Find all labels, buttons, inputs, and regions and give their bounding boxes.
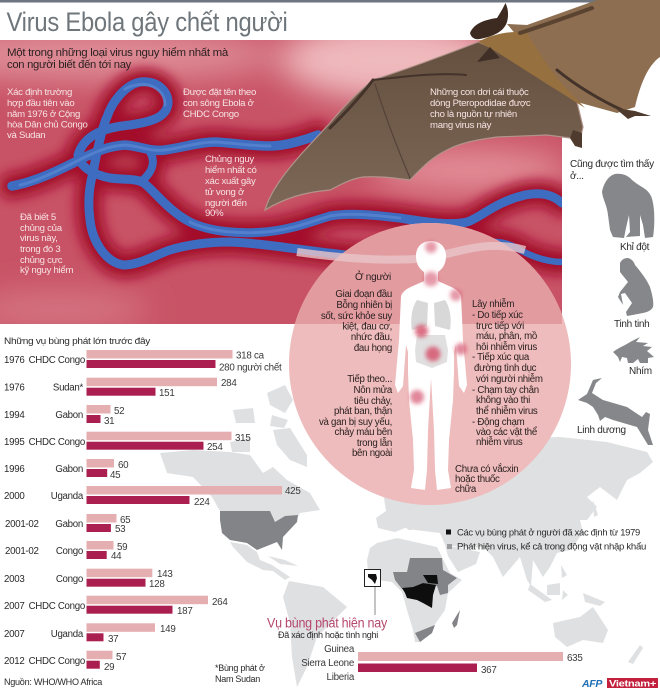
panel subtitle xyxy=(7,47,228,71)
text: transmission: nhiễm virus xyxy=(476,437,523,448)
text: transmission: máu, phân, mồ xyxy=(476,331,537,342)
Africa xyxy=(367,538,462,642)
text: five strains: Đã biết 5 xyxy=(20,212,56,223)
bar chart: current outbreak xyxy=(301,644,583,683)
top rule xyxy=(0,0,660,2)
virus seen through circle xyxy=(297,246,525,260)
text: no vaccine: chữa xyxy=(455,484,477,495)
text: fatality rate: tử vong ở xyxy=(205,187,245,198)
text: fatality rate: Chủng nguy xyxy=(205,154,254,165)
row: 1976 Sudan: 1976 xyxy=(4,382,24,394)
row: 1996 Gabon: Gabon xyxy=(55,464,83,475)
text: next stage: phát ban, thận xyxy=(334,406,392,417)
text: first case: hợp đầu tiên vào xyxy=(7,98,74,109)
bar values: 284 xyxy=(221,378,237,389)
text: named after river xyxy=(183,87,256,120)
Central America xyxy=(230,542,290,580)
text: next stage: tiêu chảy, xyxy=(354,396,392,407)
legend: Phát hiện virus, kể cả trong động vật nhập khẩu xyxy=(457,542,646,552)
bar chart: current outbreak: Sierra Leone xyxy=(301,658,355,669)
row: 1996 Gabon: 1996 xyxy=(4,464,24,475)
text: transmission: trực tiếp với xyxy=(476,321,524,332)
South America xyxy=(283,581,347,687)
human figure xyxy=(395,241,467,490)
text: bat note: Những con dơi cái thuộc xyxy=(430,87,529,98)
symptom spots xyxy=(410,241,467,404)
bar values: 128 xyxy=(149,579,165,590)
New Zealand xyxy=(628,645,643,664)
text: transmission: - Chạm tay chân xyxy=(472,385,539,396)
bar chart: current outbreak: 367 xyxy=(481,665,497,676)
text: named after river: con sông Ebola ở xyxy=(183,98,255,109)
text: five strains: trong đó 3 xyxy=(20,244,60,255)
text: fatality rate: xác xuất gây xyxy=(205,176,256,187)
text: fatality rate xyxy=(205,154,257,219)
Australia xyxy=(553,607,608,647)
bar values: 59 xyxy=(117,542,127,553)
text: five strains xyxy=(20,212,73,276)
text: transmission: - Do tiếp xúc xyxy=(472,310,523,321)
bar chart: current outbreak: Guinea xyxy=(324,644,355,655)
row: 2000 Uganda: Uganda xyxy=(51,491,84,502)
text: next stage: bên ngoài xyxy=(352,448,392,459)
row: 2000 Uganda: 2000 xyxy=(4,491,25,502)
row: 2007 CHDC Congo: CHDC Congo xyxy=(29,601,85,612)
text: transmission xyxy=(472,299,543,448)
row: 2001-02 Congo: Congo xyxy=(56,546,83,557)
text: bat note: dòng Pteropodidae được xyxy=(430,98,531,109)
text: next stage: trong lẫn xyxy=(357,438,392,449)
row: 2007 CHDC Congo: 2007 xyxy=(4,601,24,612)
panel: virus photograph xyxy=(0,20,570,328)
bar values: 224 xyxy=(194,497,210,508)
bar values: 151 xyxy=(159,388,175,399)
Eurasia xyxy=(376,437,653,586)
bar chart: past outbreaks xyxy=(4,350,301,673)
bar values: 280 người chết xyxy=(219,362,282,374)
heading: current outbreak xyxy=(267,614,387,640)
row: 2007 Uganda: Uganda xyxy=(51,629,84,640)
row: 1976 Sudan: Sudan* xyxy=(53,382,84,394)
text: fatality rate: người đến xyxy=(205,198,247,209)
North America mainland xyxy=(160,450,320,522)
footnote: Nam Sudan xyxy=(215,674,260,684)
text: no vaccine xyxy=(455,464,518,495)
text: early stage xyxy=(321,289,392,354)
panel subtitle: Một trong những loại virus nguy hiểm nhất mà xyxy=(7,47,228,59)
row: 1976 CHDC Congo xyxy=(4,350,232,368)
heading: also found in: ở... xyxy=(570,170,584,182)
text: bat note: mang virus này xyxy=(430,120,492,131)
row: 1995 CHDC Congo: 1995 xyxy=(4,437,24,448)
row: 2001-02 Congo: 2001-02 xyxy=(5,546,39,557)
text: next stage xyxy=(319,374,393,459)
text: in humans: Ở người xyxy=(355,270,391,283)
text: next stage: Tiếp theo... xyxy=(347,374,392,385)
text: transmission: Lây nhiễm xyxy=(472,299,514,310)
text: transmission: hôi nhiễm virus xyxy=(476,342,537,353)
lungs xyxy=(411,300,451,330)
row: 1994 Gabon xyxy=(4,405,110,423)
text: next stage: và gan bị suy yếu, xyxy=(319,417,392,428)
heading: also found in: Cũng được tìm thấy xyxy=(570,158,654,170)
inset: West Africa xyxy=(364,570,380,615)
text: transmission: đường tình dục xyxy=(474,363,537,374)
United States xyxy=(220,511,298,550)
text: transmission: - Động chạm xyxy=(472,417,525,428)
text: first case xyxy=(7,87,88,141)
row: 1976 Sudan xyxy=(4,378,217,396)
circle: human effects xyxy=(289,223,571,505)
bat left wing xyxy=(265,42,583,210)
row: 1976 CHDC Congo: CHDC Congo xyxy=(29,355,85,366)
source: Nguồn: WHO/WHO Africa xyxy=(4,677,103,687)
Caribbean xyxy=(268,556,298,566)
illustration: fruit bat xyxy=(265,0,660,210)
bar values xyxy=(104,350,301,673)
text: no vaccine: Chưa có vắcxin xyxy=(455,464,518,475)
text: five strains: virus này, xyxy=(20,233,58,244)
row: 2000 Uganda xyxy=(4,486,282,504)
text: no vaccine: hoặc thuốc xyxy=(455,474,500,485)
bar chart: current outbreak: Liberia xyxy=(327,672,355,683)
virus glow xyxy=(12,82,562,265)
row: 1995 CHDC Congo xyxy=(4,432,232,450)
Arctic islands xyxy=(230,385,307,467)
row: 1995 CHDC Congo: CHDC Congo xyxy=(29,437,85,448)
row: 2012 CHDC Congo: CHDC Congo xyxy=(29,656,85,667)
legend xyxy=(446,528,646,552)
text: first case: và Sudan xyxy=(7,130,45,141)
bar values: 149 xyxy=(160,624,176,635)
text: transmission: với người nhiễm xyxy=(476,374,543,385)
row: 2001-02 Gabon: 2001-02 xyxy=(5,519,39,530)
bar values: 187 xyxy=(177,606,193,617)
world map xyxy=(160,385,653,687)
bat claws xyxy=(570,108,651,148)
outbreak countries xyxy=(402,575,438,608)
text: early stage: sốt, sức khỏe suy xyxy=(321,311,392,322)
label: gorilla: Khỉ đột xyxy=(620,241,650,253)
bat head xyxy=(470,3,508,39)
heading: also found in xyxy=(570,158,654,182)
row: 1994 Gabon: 1994 xyxy=(4,410,25,421)
label: antelope: Linh dương xyxy=(577,425,626,436)
text: transmission: vào các vật thể xyxy=(476,427,537,438)
row: 2001-02 Gabon: Gabon xyxy=(55,519,83,530)
bar values: 143 xyxy=(157,569,173,580)
text: early stage: nhức đầu, xyxy=(351,332,392,343)
row: 2012 CHDC Congo: 2012 xyxy=(4,656,24,667)
bar values: 315 xyxy=(235,433,251,444)
footnote: *Bùng phát ở xyxy=(215,663,265,673)
text: next stage: chảy máu bên xyxy=(334,427,392,438)
bar values: 254 xyxy=(207,442,223,453)
row: 2001-02 Congo xyxy=(5,541,114,559)
row: 2003 Congo: 2003 xyxy=(4,574,24,585)
text: bat note: cho là nguồn tự nhiên xyxy=(430,109,517,120)
text: bat note xyxy=(430,87,531,131)
intestines xyxy=(415,335,448,368)
panel subtitle: con người biết đến tới nay xyxy=(7,59,132,71)
heading: current outbreak: Vụ bùng phát hiện nay xyxy=(267,614,387,630)
bar values: 65 xyxy=(120,515,131,526)
row: 2001-02 Gabon xyxy=(5,514,116,532)
row: 2007 Uganda xyxy=(4,623,155,641)
text: fatality rate: 90% xyxy=(205,208,224,219)
label: porcupine: Nhím xyxy=(629,366,652,377)
label: chimpanzee: Tinh tinh xyxy=(614,319,649,330)
bar chart: current outbreak: 635 xyxy=(567,653,583,664)
title: Virus Ebola gây chết người xyxy=(6,7,288,37)
row: 2012 CHDC Congo xyxy=(4,651,112,669)
text: transmission: - Tiếp xúc qua xyxy=(472,352,530,363)
text: transmission: thể nhiễm virus xyxy=(476,406,538,417)
text: first case: năm 1976 ở Cộng xyxy=(7,109,80,120)
bat wing bones xyxy=(330,8,622,178)
Arabia xyxy=(445,545,480,572)
virus found countries xyxy=(393,558,457,595)
icon: porcupine xyxy=(613,337,654,363)
text: early stage: Giai đoạn đầu xyxy=(335,289,392,300)
text: first case: Xác định trường xyxy=(7,87,72,98)
text: named after river: Được đặt tên theo xyxy=(183,87,256,98)
row: 2003 Congo: Congo xyxy=(56,574,83,585)
text: named after river: CHDC Congo xyxy=(183,109,239,120)
bar values: 44 xyxy=(111,551,122,562)
row: 1996 Gabon xyxy=(4,459,114,477)
bat right wing xyxy=(507,0,660,113)
text: transmission: không vào thi xyxy=(476,395,530,406)
bar values: 52 xyxy=(114,406,124,417)
bar values: 264 xyxy=(212,597,228,608)
bar values: 425 xyxy=(285,486,301,497)
bar values: 318 ca xyxy=(236,350,265,362)
bar values: 57 xyxy=(116,652,126,663)
text: early stage: Bỗng nhiên bị xyxy=(336,300,392,311)
text: five strains: kỹ nguy hiểm xyxy=(20,265,73,276)
bat body xyxy=(478,32,585,108)
bar values: 29 xyxy=(104,662,114,673)
row: 1994 Gabon: Gabon xyxy=(55,410,83,421)
heading: past outbreaks: Những vụ bùng phát lớn trước đây xyxy=(4,336,151,347)
icon: antelope xyxy=(578,378,653,445)
row: 2007 CHDC Congo xyxy=(4,596,208,614)
Italy xyxy=(400,515,412,530)
icon: gorilla xyxy=(602,174,654,238)
icon: chimpanzee xyxy=(618,258,653,316)
row: 2007 Uganda: 2007 xyxy=(4,629,24,640)
bar values: 37 xyxy=(108,634,118,645)
bar values: 45 xyxy=(110,470,121,481)
row: 2003 Congo xyxy=(4,569,152,587)
bar values: 60 xyxy=(118,460,129,471)
text: first case: hòa Dân chủ Congo xyxy=(7,120,88,130)
row: 1976 CHDC Congo: 1976 xyxy=(4,355,24,366)
text: fatality rate: hiểm nhất có xyxy=(205,165,257,176)
virus strand xyxy=(12,82,562,265)
bar values: 53 xyxy=(115,524,126,535)
Southeast Asian islands xyxy=(528,500,605,606)
bat shoulder shadow xyxy=(477,47,500,62)
text: early stage: kiệt, đau cơ, xyxy=(342,322,392,332)
logo: AFP Vietnam+ xyxy=(581,678,658,689)
legend: Các vụ bùng phát ở người đã xác định từ 1979 xyxy=(457,528,640,538)
text: five strains: chủng cực xyxy=(20,255,63,266)
text: next stage: Nôn mửa xyxy=(354,385,393,396)
bar values: 31 xyxy=(104,416,114,427)
heading: current outbreak: Đã xác định hoặc tình nghi xyxy=(278,630,378,640)
text: early stage: đau họng xyxy=(354,343,392,354)
text: five strains: chủng của xyxy=(20,223,63,234)
footnote xyxy=(215,663,265,684)
